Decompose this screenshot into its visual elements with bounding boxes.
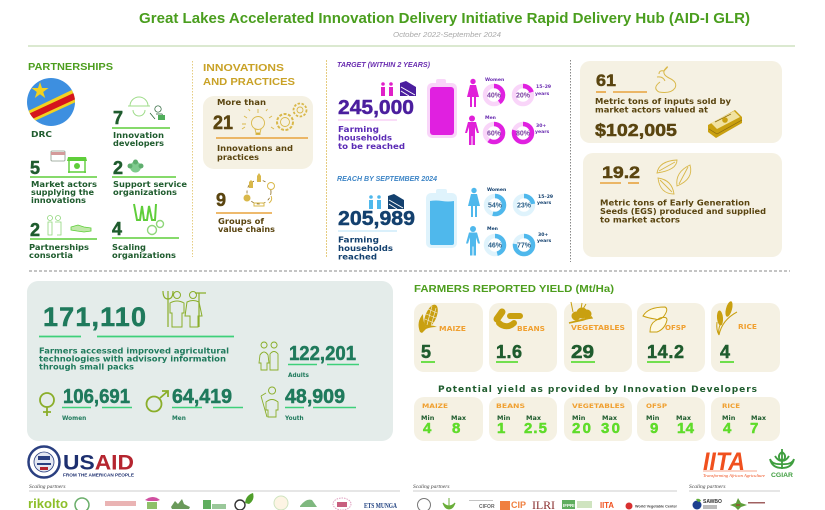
stat: innovation developers: Innovation [113,131,164,140]
donut: 30+ 77% [515,236,533,254]
labels: reach demographics: years [537,200,551,206]
stat: groups of value chains: value chains [218,225,275,234]
stat: support service organizations: organizations [113,188,177,197]
logo: USAID [28,446,134,478]
donut: 15-29 20%: 20% [516,92,531,100]
logo: IITA: IITA [703,448,745,476]
stat: market actors: supplying the [31,188,95,197]
footer: scaling partners right: SAWBO [703,499,722,505]
donut: men 60%: 60% [487,130,502,138]
labels: target demographics: 30+ [536,123,546,129]
potential card: rice: 7 [750,420,758,437]
potential card: beans: Min [497,414,511,422]
logo: USAID: FROM THE AMERICAN PEOPLE [63,472,134,478]
potential card: vegetables: 20 [572,420,591,437]
icon: lightbulb and gears [242,104,306,134]
potential card: OFSP: Min [646,414,660,422]
subtitle: period: October 2022-September 2024 [393,32,501,39]
panel: early generation seeds: 19.2 [602,164,640,182]
card: OFSP: OFSP [665,324,686,332]
panel: early generation seeds [583,153,782,257]
stat: innovation developers: 7 [113,108,123,128]
footer: scaling partners right: Scaling partners [689,484,726,490]
stat: groups of value chains: Groups of [218,217,265,226]
icon: battery full [427,79,457,138]
potential card: vegetables: Max [602,414,618,422]
stat: adults 122,201: Adults [288,373,310,379]
potential card: OFSP: OFSP [646,402,667,410]
stat: innovation developers [112,97,170,148]
icon: vegetables [569,302,593,323]
heading: partnerships: PARTNERSHIPS [28,61,113,73]
labels: reach demographics [487,187,553,244]
panel: target [337,60,551,151]
card: beans: 1.6 [496,342,522,362]
icon: cash stack [708,110,742,138]
card: vegetables: 29 [571,342,594,362]
card: rice: 4 [720,342,730,362]
potential card: maize [414,397,483,441]
panel: early generation seeds: to market actors [600,216,680,224]
potential card: vegetables: VEGETABLES [572,402,625,410]
card: vegetables [564,302,632,372]
stat: 245,000: 245,000 [338,97,414,119]
donut: men 46% [486,236,504,254]
panel: partnerships [24,61,188,260]
icon: farmers and field [369,194,404,209]
stat: groups of value chains [216,173,275,234]
footer: scaling partners right [689,484,780,510]
donut: 30+ 77%: 77% [517,242,532,250]
potential card: rice: Min [722,414,736,422]
heading: reported yield: FARMERS REPORTED YIELD (Mt/Ha) [414,283,614,295]
donut: men 46%: 46% [488,242,503,250]
text: farming households reached: reached [338,252,377,262]
icon: man [466,226,480,256]
icon: sweet potato [643,307,667,332]
panel: inputs sold: Metric tons of inputs sold by [595,97,732,106]
text: farming households reached: Farming [338,236,379,244]
footer: scaling partners left: Scaling partners [29,484,66,490]
labels: target demographics: years [535,129,549,135]
card: maize: MAIZE [439,325,466,333]
icon: seeds [657,160,691,194]
heading: target: TARGET (WITHIN 2 YEARS) [337,60,430,69]
icon: beans [497,312,520,326]
stat: market actors: 5 [30,158,40,178]
title: Great Lakes Accelerated Innovation Delivery Initiative Rapid Delivery Hub (AID-I GLR) [139,11,750,27]
logo: USAID: USAID [63,452,134,474]
potential card: OFSP: 14 [677,420,695,437]
panel: inputs sold: 61 [596,71,616,90]
potential card: rice: 4 [723,420,732,437]
icon: rice [716,300,737,335]
label: DRC: DRC [31,130,52,139]
labels: target demographics: 15–29 [536,84,551,90]
stat: scaling organizations [112,204,179,260]
footer: scaling partners middle: CIFOR [479,504,495,510]
card: rice: RICE [738,323,757,331]
stat: innovation developers: developers [113,139,164,148]
stat: support service organizations [112,158,188,197]
card: 21 innovations [203,96,313,169]
labels: target demographics: Men [485,115,496,121]
stat: market actors: innovations [31,196,86,205]
donut: 15-29 20% [514,86,532,104]
logo: CGIAR [770,449,794,479]
icon: DRC flag [27,78,75,126]
panel: farmers reported yield [414,283,780,441]
donut: 30+ 80% [514,124,532,142]
panel: inputs sold [580,61,782,143]
stat: women 106,691: 106,691 [63,386,130,408]
potential card: vegetables: 30 [601,420,620,437]
potential card: rice: Max [751,414,767,422]
potential card: OFSP [637,397,705,441]
panel: innovations and practices [203,62,313,234]
text: farming households reached: households [338,244,393,253]
labels: reach demographics: 15–29 [538,194,553,200]
potential card: OFSP: 9 [650,420,658,437]
panel: farmers accessed technologies [27,281,393,441]
donut: 15-29 23% [515,196,533,214]
labels: reach demographics: Women [487,187,506,193]
stat: scaling organizations: 4 [112,219,122,239]
heading: reach: REACH BY SEPTEMBER 2024 [337,174,438,183]
donut: women 54%: 54% [488,202,503,210]
potential card: vegetables: Min [572,414,586,422]
panel: reach [337,174,553,262]
card: OFSP [637,303,705,372]
labels: reach demographics: Men [487,226,498,232]
text: farmers accessed: through small packs [39,362,134,372]
heading: innovations and practices: AND PRACTICES [203,76,295,88]
stat: support service organizations: Support service [113,180,188,189]
footer: scaling partners middle [413,484,678,510]
potential card: beans: 2.5 [524,420,547,437]
text: farmers accessed: Farmers accessed improved agricultural [39,346,229,356]
stat: adults 122,201: 122,201 [289,343,356,365]
donut: women 54% [486,196,504,214]
stat: adults 122,201 [259,342,359,379]
text: farming households to be reached: to be reached [338,142,405,151]
stat: partnerships consortia: 2 [30,220,40,240]
stat: partnerships consortia: Partnerships [29,243,89,252]
stat: scaling organizations: organizations [112,251,176,260]
panel: inputs sold: market actors valued at [595,106,708,114]
labels: reach demographics: years [537,238,551,244]
card: beans: BEANS [517,325,545,333]
stat: 171,110: 171,110 [43,302,146,332]
potential card: vegetables [564,397,632,441]
labels: target demographics: Women [485,77,504,83]
card: beans [489,303,557,372]
potential card: maize: 8 [452,420,460,437]
potential card: beans: Max [526,414,542,422]
stat: men 64,419: 64,419 [172,386,232,408]
text: farming households to be reached: households [338,134,392,142]
icon: woman [467,79,479,107]
logo: IITA: Transforming African Agriculture [703,473,765,478]
potential card: rice: RICE [722,402,740,410]
footer: scaling partners left [28,484,400,510]
logo: IITA [703,448,765,478]
potential card: beans: 1 [497,420,505,437]
card: maize [414,303,483,372]
icon: battery partly filled [426,189,457,248]
donut: women 40% [485,86,503,104]
icon: farmers and field [381,81,416,96]
stat: market actors [30,151,97,205]
card: vegetables: VEGETABLES [571,324,625,332]
stat: youth 48,909: 48,909 [285,386,345,408]
text: farming households to be reached: Farming [338,125,379,134]
stat: 205,989: 205,989 [338,208,415,230]
stat: youth 48,909 [261,386,356,422]
card: 21 innovations: More than [217,98,266,107]
logo: CGIAR: CGIAR [771,472,793,479]
potential card: rice [711,397,780,441]
potential card: OFSP: Max [676,414,692,422]
text: farmers accessed: technologies with advisory information [39,354,226,364]
panel: inputs sold: $102,005 [595,120,677,140]
stat: women 106,691 [40,386,132,422]
potential card: maize: Max [451,414,467,422]
card: rice [711,300,780,372]
card: maize: 5 [421,342,431,362]
potential card: maize: 4 [423,420,432,437]
icon: man [465,116,479,145]
labels: target demographics: years [535,91,549,97]
stat: women 106,691: Women [62,416,86,422]
icon: farmer couple [163,291,206,327]
card: 21 innovations: 21 [213,113,233,134]
potential card: maize: Min [421,414,435,422]
card: 21 innovations: Innovations and [217,144,293,153]
potential card: beans [489,397,557,441]
potential card: maize: MAIZE [422,402,448,410]
donut: 15-29 23%: 23% [517,202,532,210]
footer: scaling partners middle: CIP [511,500,526,510]
footer: scaling partners middle: IFPRI [563,503,575,508]
icon: maize [419,303,441,333]
footer: scaling partners left: ETS MUNGA [364,501,397,510]
labels: target demographics [485,77,551,135]
stat: partnerships consortia: consortia [29,251,73,260]
donut: men 60% [485,124,503,142]
stat: support service organizations: 2 [113,158,123,178]
icon: woman [468,188,480,217]
donut: 30+ 80%: 80% [516,130,531,138]
heading: innovations and practices: INNOVATIONS [203,62,284,74]
panel: early generation seeds: Seeds (EGS) produced and supplied [600,207,766,216]
card: 21 innovations: practices [217,153,259,162]
labels: reach demographics: 30+ [538,232,548,238]
stat: men 64,419 [146,386,243,422]
stat: groups of value chains: 9 [216,190,226,210]
stat: market actors: Market actors [31,180,97,189]
stat: men 64,419: Men [172,416,186,422]
footer: scaling partners middle: Scaling partners [413,484,450,490]
icon: sprout [656,67,676,92]
stat: youth 48,909: Youth [284,416,304,422]
stat: partnerships consortia [29,216,97,260]
potential card: beans: BEANS [496,402,525,410]
heading: potential yield: Potential yield as provided by Innovation Developers [438,385,757,395]
panel: early generation seeds: Metric tons of Early Generation [600,198,750,208]
stat: scaling organizations: Scaling [112,243,146,252]
donut: women 40%: 40% [487,92,502,100]
card: OFSP: 14.2 [647,342,684,362]
footer: scaling partners middle: World Vegetable Center [635,504,678,508]
footer: scaling partners middle: IITA [600,501,614,510]
